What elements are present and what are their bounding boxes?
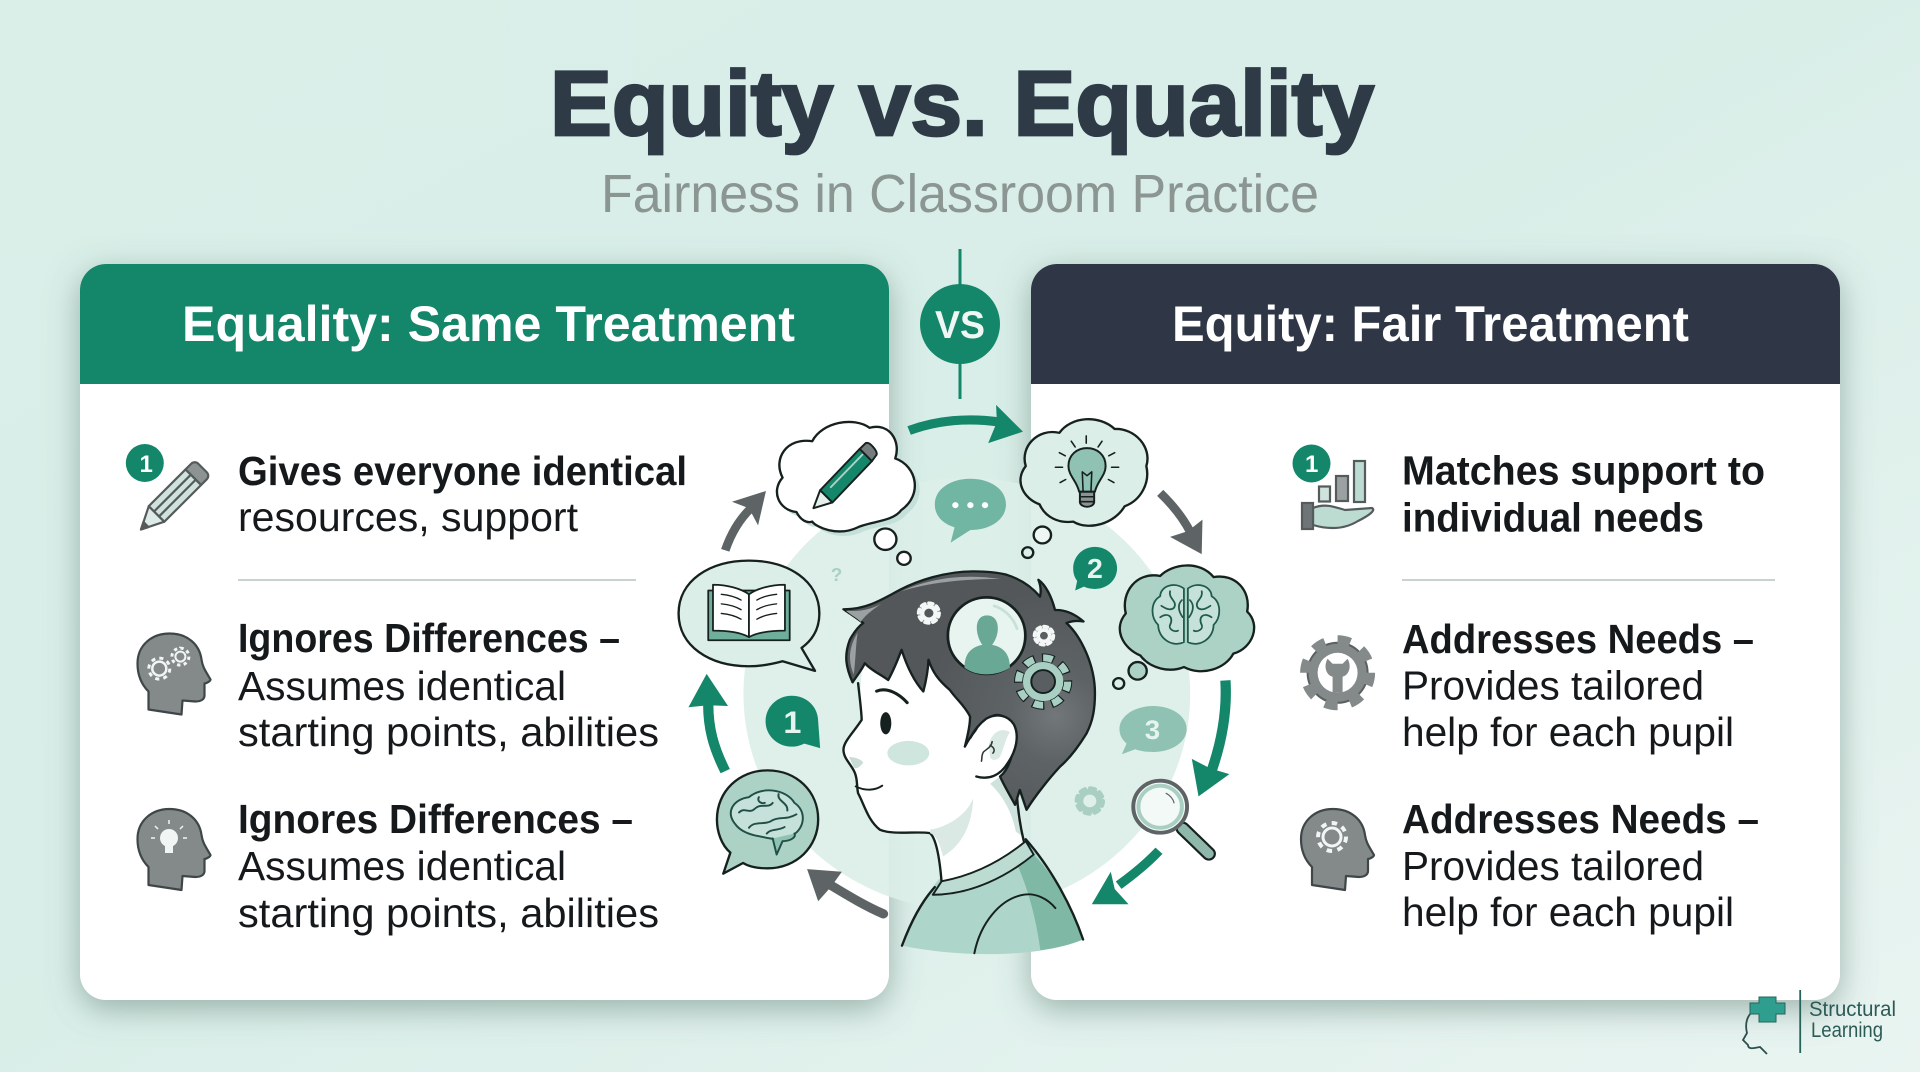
- point 1 text: Matches support to: [1402, 448, 1765, 494]
- face and neck: [843, 629, 1026, 881]
- point 2 text: Assumes identical: [238, 663, 566, 709]
- hair highlights: [846, 577, 1000, 675]
- point 2 text: Addresses Needs –: [1402, 616, 1754, 662]
- arrow: right green: [1192, 680, 1229, 796]
- point 2 text: Ignores Differences –: [238, 615, 620, 661]
- number bubble 3: [1119, 706, 1187, 754]
- title: Equity vs. Equality: [550, 53, 1374, 155]
- point 3 text: starting points, abilities: [238, 890, 659, 936]
- point 1 text: resources, support: [238, 494, 579, 540]
- vs badge: VS: [935, 304, 985, 347]
- eye: [880, 712, 891, 734]
- icon: bulb: [1055, 436, 1119, 507]
- arrow: top green: [909, 405, 1023, 443]
- head gears: [919, 603, 1068, 705]
- icon: head with gears: [138, 634, 210, 714]
- speech bubble dots: [935, 479, 1006, 543]
- point 3 text: help for each pupil: [1402, 889, 1734, 935]
- question mark: ?: [831, 564, 842, 585]
- logo: Structural Learning: Learning: [1811, 1019, 1883, 1042]
- ear: [970, 715, 1017, 778]
- point 1 text: individual needs: [1402, 494, 1704, 540]
- number badge 1: 1: [140, 451, 153, 478]
- equality list: [126, 444, 687, 936]
- number bubble 1: 1: [783, 704, 801, 740]
- point 2 text: Provides tailored: [1402, 662, 1704, 708]
- neck-shadow behind hair: [990, 776, 1024, 837]
- icon: small mint gear: [1077, 788, 1103, 814]
- central illustration: [679, 405, 1254, 954]
- vs badge: [920, 249, 1000, 399]
- icon: brain: [1152, 585, 1219, 644]
- equity header: [1031, 264, 1840, 384]
- subtitle: Fairness in Classroom Practice: [601, 164, 1319, 224]
- point 3 text: Addresses Needs –: [1402, 796, 1759, 842]
- backdrop circle: [743, 478, 1190, 910]
- number badge 1: 1: [1305, 451, 1318, 478]
- icon: side brain: [731, 790, 803, 855]
- brain cloud: [1113, 565, 1254, 689]
- logo: Structural Learning: Structural: [1809, 998, 1896, 1021]
- boy: [843, 571, 1095, 954]
- equality header: [80, 264, 889, 384]
- point 3 text: [1402, 796, 1759, 935]
- equity heading: Equity: Fair Treatment: [1172, 296, 1689, 352]
- pencil thought cloud: [777, 422, 920, 565]
- point 1 text: [238, 448, 687, 540]
- icon: head with bulb: [138, 809, 210, 890]
- icon: head with gear: [1301, 809, 1374, 890]
- equity list: [1292, 444, 1775, 935]
- arrow: left green: [688, 674, 728, 771]
- icon: hand with bars: [1302, 461, 1373, 529]
- shirt: [902, 839, 1083, 954]
- point 2 text: [1402, 616, 1754, 755]
- book speech bubble: [679, 561, 819, 671]
- point 2 text: [238, 615, 659, 755]
- logo cross: [1750, 997, 1785, 1022]
- brain speech bubble: [717, 770, 818, 874]
- lightbulb thought cloud: [1021, 419, 1148, 558]
- arrow: lower grey: [807, 869, 883, 914]
- point 1 text: [1402, 448, 1765, 540]
- neck shadow: [930, 798, 973, 856]
- point 3 text: Assumes identical: [238, 843, 566, 889]
- arrow: upper right grey: [1160, 493, 1202, 554]
- eyebrow: [877, 690, 907, 703]
- big gear: [1019, 658, 1068, 705]
- point 2 text: starting points, abilities: [238, 709, 659, 755]
- panel: equality: [80, 264, 889, 1000]
- point 2 text: help for each pupil: [1402, 709, 1734, 755]
- icon: gear with wrench: [1306, 641, 1370, 705]
- logo: Structural Learning: [1743, 990, 1896, 1054]
- number bubble 1: [766, 696, 820, 748]
- icon: pencil: [133, 460, 210, 537]
- nose shade: [849, 757, 863, 768]
- point 3 text: Ignores Differences –: [238, 796, 633, 842]
- point 3 text: Provides tailored: [1402, 843, 1704, 889]
- icon: magnifier: [1133, 781, 1209, 854]
- arrow: upper left grey: [725, 491, 766, 550]
- face outline: [843, 683, 1024, 881]
- icon: pencil: [813, 443, 877, 508]
- panel: equity: [1031, 264, 1840, 1000]
- number badge 1: [1292, 444, 1330, 482]
- equality heading: Equality: Same Treatment: [182, 296, 795, 352]
- point 1 text: Gives everyone identical: [238, 448, 687, 494]
- thought portrait: [948, 597, 1025, 674]
- mouth: [856, 786, 882, 790]
- number bubble 2: 2: [1087, 554, 1103, 584]
- hair: [843, 571, 1095, 810]
- logo head outline: [1743, 1010, 1767, 1054]
- arrow: lower right green: [1092, 851, 1159, 904]
- point 3 text: [238, 796, 659, 936]
- number bubble 3: 3: [1145, 714, 1160, 745]
- number bubble 2: [1073, 547, 1117, 590]
- number badge 1: [126, 444, 164, 482]
- icon: book: [708, 585, 790, 640]
- collar: [933, 841, 1034, 895]
- cheek: [887, 741, 929, 765]
